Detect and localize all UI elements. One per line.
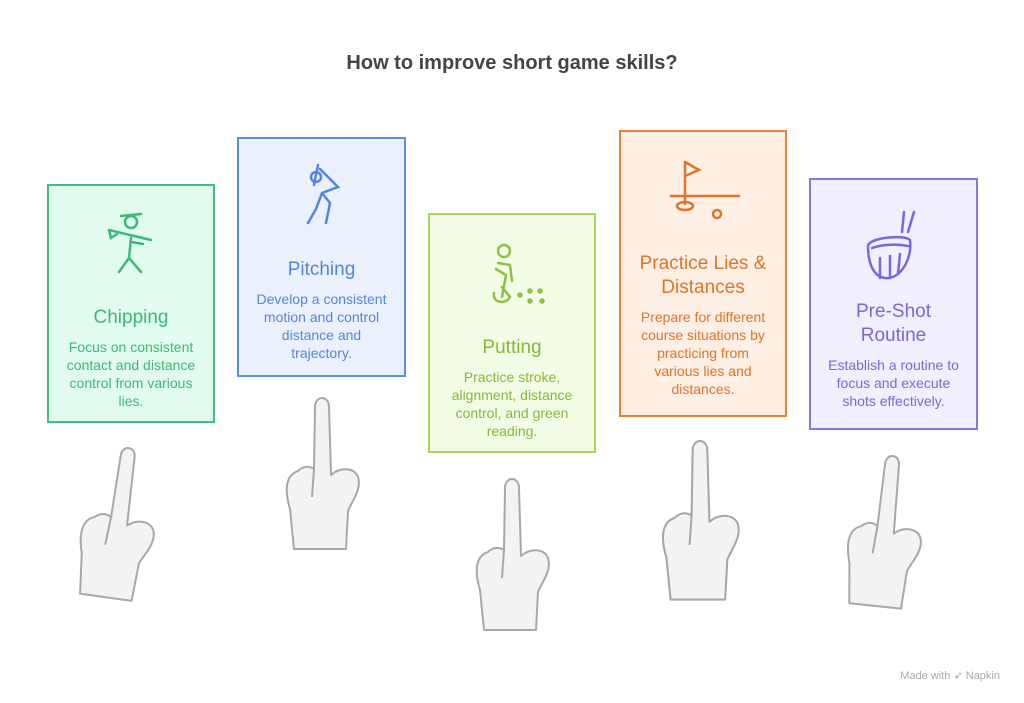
hand 5	[842, 452, 930, 610]
text: Establish a routine to focus and execute shots effectively.	[828, 357, 959, 409]
hand 1	[73, 443, 165, 603]
hand 3	[477, 479, 549, 630]
icon: golfer with club	[108, 212, 152, 274]
heading	[856, 301, 931, 346]
heading: Pitching	[288, 259, 355, 280]
heading: Practice Lies &	[640, 253, 766, 274]
hand 2	[287, 398, 359, 549]
panel: practice lies	[619, 130, 787, 417]
heading: Chipping	[94, 307, 168, 328]
icon: flag and hole	[670, 160, 740, 220]
hand 4	[663, 441, 739, 600]
heading: Putting	[482, 337, 542, 358]
icon: swinging golfer	[306, 164, 340, 224]
panel: putting	[428, 213, 596, 453]
panel: pitching	[237, 137, 406, 377]
icon: club head	[866, 210, 916, 280]
heading: Distances	[661, 277, 745, 298]
panel: pre-shot routine	[809, 178, 978, 430]
heading: Routine	[861, 325, 926, 346]
heading	[640, 253, 766, 298]
text: Prepare for different course situations by practicing from various lies and distances.	[641, 309, 765, 397]
heading: Pre-Shot	[856, 301, 931, 322]
text: Develop a consistent motion and control distance and trajectory.	[257, 291, 386, 361]
text: Practice stroke, alignment, distance control, and green reading.	[452, 369, 572, 439]
footer credit: Made with ➶ Napkin	[900, 670, 1000, 682]
panel: chipping	[47, 184, 215, 423]
title: How to improve short game skills?	[346, 52, 678, 74]
text: Focus on consistent contact and distance control from various lies.	[67, 339, 195, 409]
icon: putting golfer	[492, 244, 545, 304]
